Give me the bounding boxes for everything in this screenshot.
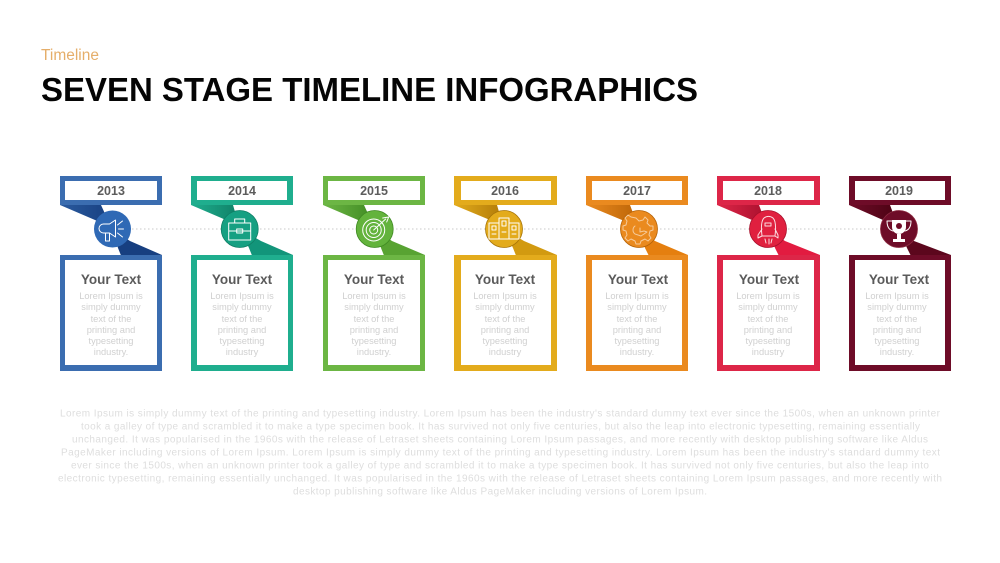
content box 2017: typesetting	[615, 336, 659, 346]
content box 2017: text of the	[617, 314, 657, 324]
stage 2015	[323, 176, 425, 371]
content box 2013: Your Text	[81, 272, 142, 287]
content box 2016	[454, 255, 557, 371]
stage 2019	[849, 176, 951, 371]
ribbon 2019	[849, 205, 951, 258]
year box 2016: 2016	[491, 184, 519, 198]
content box 2019: printing and	[873, 325, 921, 335]
content box 2014: Lorem Ipsum is	[210, 291, 274, 301]
icon: trophy	[880, 210, 918, 248]
content box 2015: Your Text	[344, 272, 405, 287]
content box 2015: Lorem Ipsum is	[342, 291, 406, 301]
content box 2016: Lorem Ipsum is	[473, 291, 537, 301]
body paragraph: Lorem Ipsum is simply dummy text of the printing and typesetting industry. Lorem Ipsum has been the industry's standard dummy text ever since the 1500s, when an unknown printer	[60, 408, 941, 420]
year box 2018	[717, 176, 820, 205]
icon: megaphone	[94, 210, 131, 248]
content box 2017: printing and	[613, 325, 661, 335]
content box 2016: typesetting	[483, 336, 527, 346]
ribbon 2017	[586, 205, 688, 258]
content box 2017: Your Text	[608, 272, 669, 287]
content box 2013: industry.	[94, 347, 128, 357]
body paragraph: unchanged. It was popularised in the 1960s with the release of Letraset sheets containing Lorem Ipsum passages, and more recently with desktop publishing software like Aldus	[72, 434, 928, 446]
title: SEVEN STAGE TIMELINE INFOGRAPHICS	[41, 71, 698, 108]
stage 2017	[586, 176, 688, 371]
ribbon 2015	[323, 205, 425, 258]
content box 2016: printing and	[481, 325, 529, 335]
content box 2015: text of the	[354, 314, 394, 324]
stage 2013	[60, 176, 162, 371]
content box 2013	[60, 255, 162, 371]
content box 2013: simply dummy	[81, 302, 141, 312]
eyebrow label: Timeline	[41, 47, 99, 64]
year box 2018: 2018	[754, 184, 782, 198]
body paragraph: PageMaker including versions of Lorem Ipsum. Lorem Ipsum is simply dummy text of the printing and typesetting industry. Lorem Ipsum has been the industry's standard dummy text	[61, 448, 940, 458]
icon: gear and wrench	[620, 210, 658, 248]
content box 2013: text of the	[91, 314, 131, 324]
ribbon 2018	[717, 205, 820, 258]
content box 2018	[717, 255, 820, 371]
content box 2018: Lorem Ipsum is	[736, 291, 800, 301]
stage 2014	[191, 176, 293, 371]
content box 2014: printing and	[218, 325, 266, 335]
icon: briefcase	[221, 210, 258, 248]
content box 2018: simply dummy	[738, 302, 798, 312]
content box 2019: typesetting	[875, 336, 919, 346]
content box 2015	[323, 255, 425, 371]
year box 2017	[586, 176, 688, 205]
year box 2017: 2017	[623, 184, 651, 198]
content box 2014: typesetting	[220, 336, 264, 346]
year box 2019: 2019	[885, 184, 913, 198]
icon: rocket	[750, 210, 786, 248]
content box 2014: simply dummy	[212, 302, 272, 312]
year box 2014	[191, 176, 293, 205]
content box 2015: printing and	[350, 325, 398, 335]
content box 2018: printing and	[744, 325, 792, 335]
content box 2015: industry.	[357, 347, 391, 357]
year box 2013: 2013	[97, 184, 125, 198]
content box 2014: text of the	[222, 314, 262, 324]
content box 2016: simply dummy	[475, 302, 535, 312]
body paragraph: ever since the 1500s, when an unknown printer took a galley of type and scrambled it to make a type specimen book. It has survived not only five centuries, but also the leap into	[71, 460, 929, 472]
year box 2016	[454, 176, 557, 205]
content box 2017	[586, 255, 688, 371]
content box 2019: simply dummy	[867, 302, 927, 312]
content box 2014	[191, 255, 293, 371]
content box 2018: typesetting	[746, 336, 790, 346]
body paragraph	[58, 408, 942, 498]
dotted timeline connector	[132, 228, 882, 230]
content box 2017: industry.	[620, 347, 654, 357]
body paragraph: desktop publishing software like Aldus PageMaker including versions of Lorem Ipsum.	[293, 486, 707, 498]
stage 2018	[717, 176, 820, 371]
content box 2017: Lorem Ipsum is	[605, 291, 669, 301]
body paragraph: electronic typesetting, remaining essentially unchanged. It was popularised in the 1960s with the release of Letraset sheets containing Lorem Ipsum passages, and more recently with	[58, 474, 942, 484]
content box 2018: industry	[752, 347, 785, 357]
content box 2015: typesetting	[352, 336, 396, 346]
content box 2016: text of the	[485, 314, 525, 324]
content box 2016: Your Text	[475, 272, 536, 287]
content box 2014: Your Text	[212, 272, 273, 287]
content box 2019	[849, 255, 951, 371]
body paragraph: took a galley of type and scrambled it to make a type specimen book. It has survived not only five centuries, but also the leap into electronic typesetting, remaining essentially	[81, 422, 920, 432]
content box 2019: industry.	[880, 347, 914, 357]
icon: buildings	[486, 210, 522, 248]
content box 2018: Your Text	[739, 272, 800, 287]
year box 2015	[323, 176, 425, 205]
year box 2014: 2014	[228, 184, 256, 198]
content box 2019: Lorem Ipsum is	[865, 291, 929, 301]
content box 2013: Lorem Ipsum is	[79, 291, 143, 301]
content box 2019: text of the	[877, 314, 917, 324]
year box 2019	[849, 176, 951, 205]
content box 2016: industry	[489, 347, 522, 357]
year box 2015: 2015	[360, 184, 388, 198]
content box 2013: printing and	[87, 325, 135, 335]
content box 2018: text of the	[748, 314, 788, 324]
year box 2013	[60, 176, 162, 205]
ribbon 2016	[454, 205, 557, 258]
content box 2017: simply dummy	[607, 302, 667, 312]
content box 2019: Your Text	[869, 272, 930, 287]
ribbon 2014	[191, 205, 293, 258]
content box 2013: typesetting	[89, 336, 133, 346]
icon: target	[356, 210, 393, 248]
content box 2015: simply dummy	[344, 302, 404, 312]
ribbon 2013	[60, 205, 162, 258]
content box 2014: industry	[226, 347, 259, 357]
stage 2016	[454, 176, 557, 371]
